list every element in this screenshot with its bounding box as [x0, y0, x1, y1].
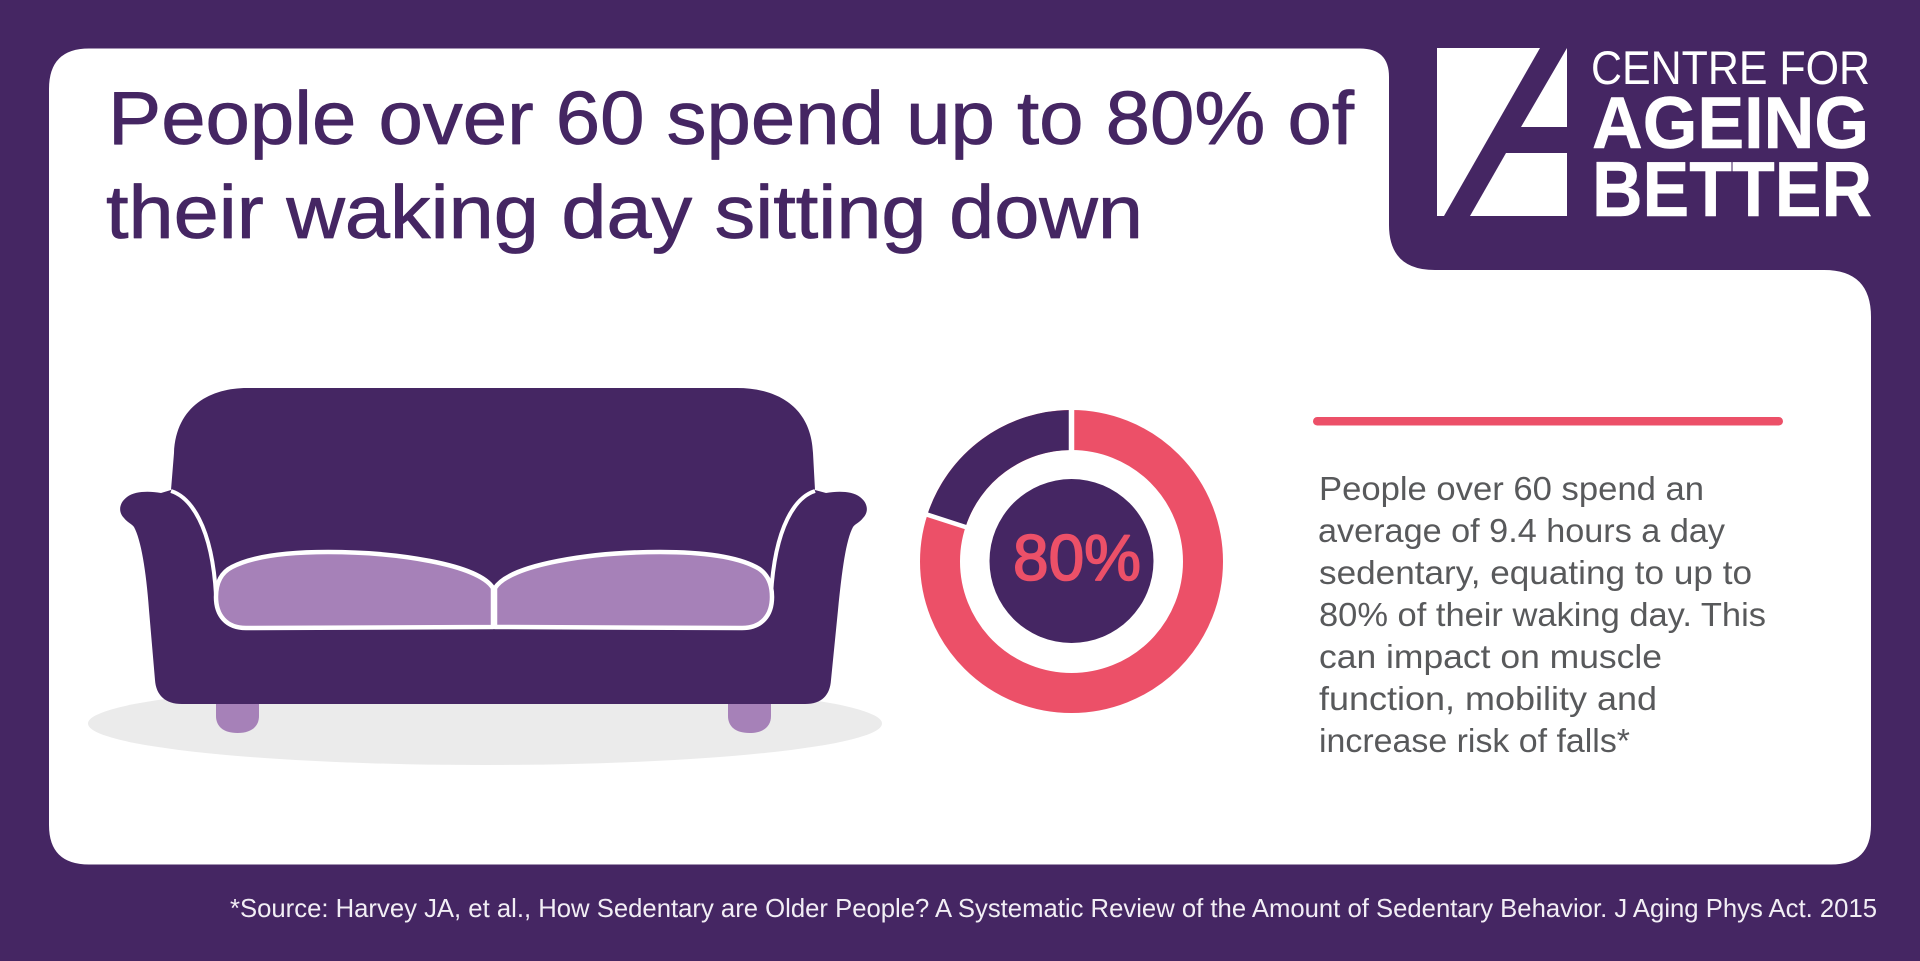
sofa arm outlines — [171, 491, 815, 595]
logo wordmark: CENTRE FOR — [1591, 41, 1870, 94]
source footnote: *Source: Harvey JA, et al., How Sedentary are Older People? A Systematic Review of the Amount of Sedentary Behavior. J Aging Phys Act. 2015 — [230, 893, 1877, 923]
donut label: 80% — [1013, 521, 1141, 594]
title: People over 60 spend up to 80% of — [108, 76, 1354, 160]
pink divider bar — [1313, 417, 1783, 426]
body text: increase risk of falls* — [1319, 722, 1630, 759]
donut centre circle — [990, 479, 1154, 643]
body text: average of 9.4 hours a day — [1318, 512, 1726, 549]
donut separators — [923, 405, 1072, 529]
icon: sofa — [88, 388, 882, 765]
donut purple segment 20% — [946, 430, 1072, 521]
body text: People over 60 spend an — [1319, 470, 1704, 507]
sofa cushions — [216, 552, 772, 628]
sofa body — [120, 388, 867, 704]
logo wordmark: BETTER — [1592, 145, 1872, 233]
logo wordmark: AGEING — [1592, 83, 1869, 164]
sofa floor shadow — [88, 682, 882, 765]
body text: can impact on muscle — [1319, 638, 1662, 675]
sofa legs — [216, 700, 771, 733]
title: their waking day sitting down — [106, 170, 1143, 254]
body text — [1318, 470, 1766, 759]
body text: function, mobility and — [1319, 680, 1657, 717]
body text: sedentary, equating to up to — [1319, 554, 1752, 591]
logo wordmark — [1591, 41, 1872, 233]
donut pink segment 80% — [940, 430, 1203, 693]
body text: 80% of their waking day. This — [1319, 596, 1766, 633]
donut chart: 80% — [923, 405, 1203, 693]
icon: stylised A mark — [1437, 48, 1567, 216]
title — [106, 76, 1354, 254]
logo: Centre for Ageing Better — [1437, 41, 1872, 233]
